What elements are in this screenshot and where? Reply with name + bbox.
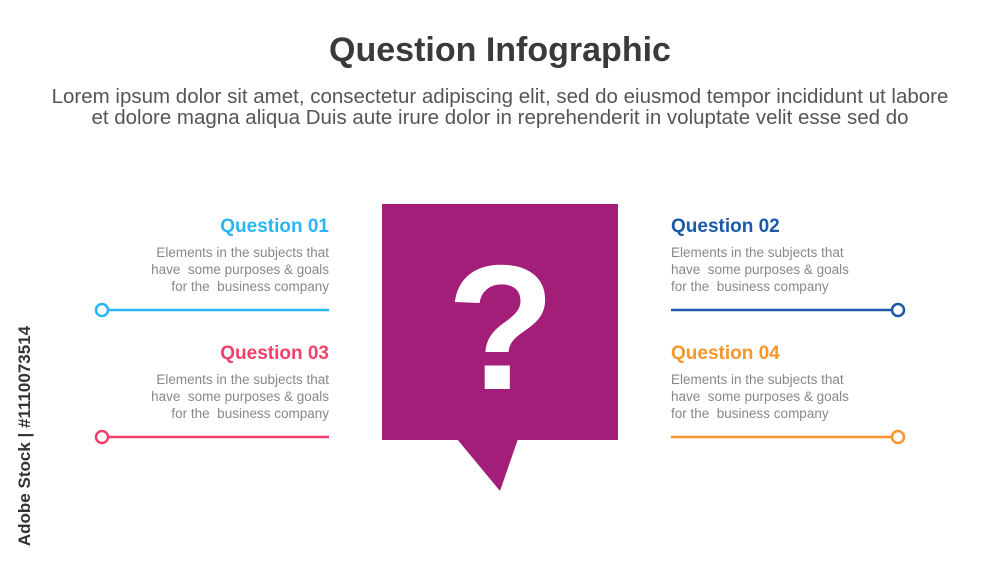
question 04: Elements in the subjects that — [671, 372, 844, 387]
question 02: Elements in the subjects that — [671, 245, 844, 260]
subtitle — [52, 85, 948, 129]
question 04: Question 04 — [671, 343, 780, 364]
question 02: Question 02 — [671, 216, 780, 237]
watermark vertical text: Adobe Stock | #1110073514 — [15, 326, 34, 546]
speech bubble with question mark — [382, 204, 618, 491]
speech bubble with question mark: ? — [447, 228, 555, 427]
question 03: for the business company — [171, 406, 329, 421]
line 03 — [96, 431, 329, 443]
question 02: have some purposes & goals — [671, 262, 849, 277]
question 01: Elements in the subjects that — [156, 245, 329, 260]
question 01: for the business company — [171, 279, 329, 294]
subtitle: Lorem ipsum dolor sit amet, consectetur adipiscing elit, sed do eiusmod tempor incididunt ut labore — [52, 85, 948, 108]
question 04: have some purposes & goals — [671, 389, 849, 404]
question 04 — [671, 343, 849, 421]
title: Question Infographic — [329, 31, 671, 69]
line 01 — [96, 304, 329, 316]
question 03 — [151, 343, 329, 421]
question 04: for the business company — [671, 406, 829, 421]
question 03: have some purposes & goals — [151, 389, 329, 404]
question 01: have some purposes & goals — [151, 262, 329, 277]
line 04 — [671, 431, 904, 443]
question 03: Question 03 — [220, 343, 329, 364]
question 03: Elements in the subjects that — [156, 372, 329, 387]
question 01 — [151, 216, 329, 294]
subtitle: et dolore magna aliqua Duis aute irure dolor in reprehenderit in voluptate velit esse sed do — [91, 106, 909, 129]
question 02 — [671, 216, 849, 294]
line 02 — [671, 304, 904, 316]
question 02: for the business company — [671, 279, 829, 294]
question 01: Question 01 — [220, 216, 329, 237]
